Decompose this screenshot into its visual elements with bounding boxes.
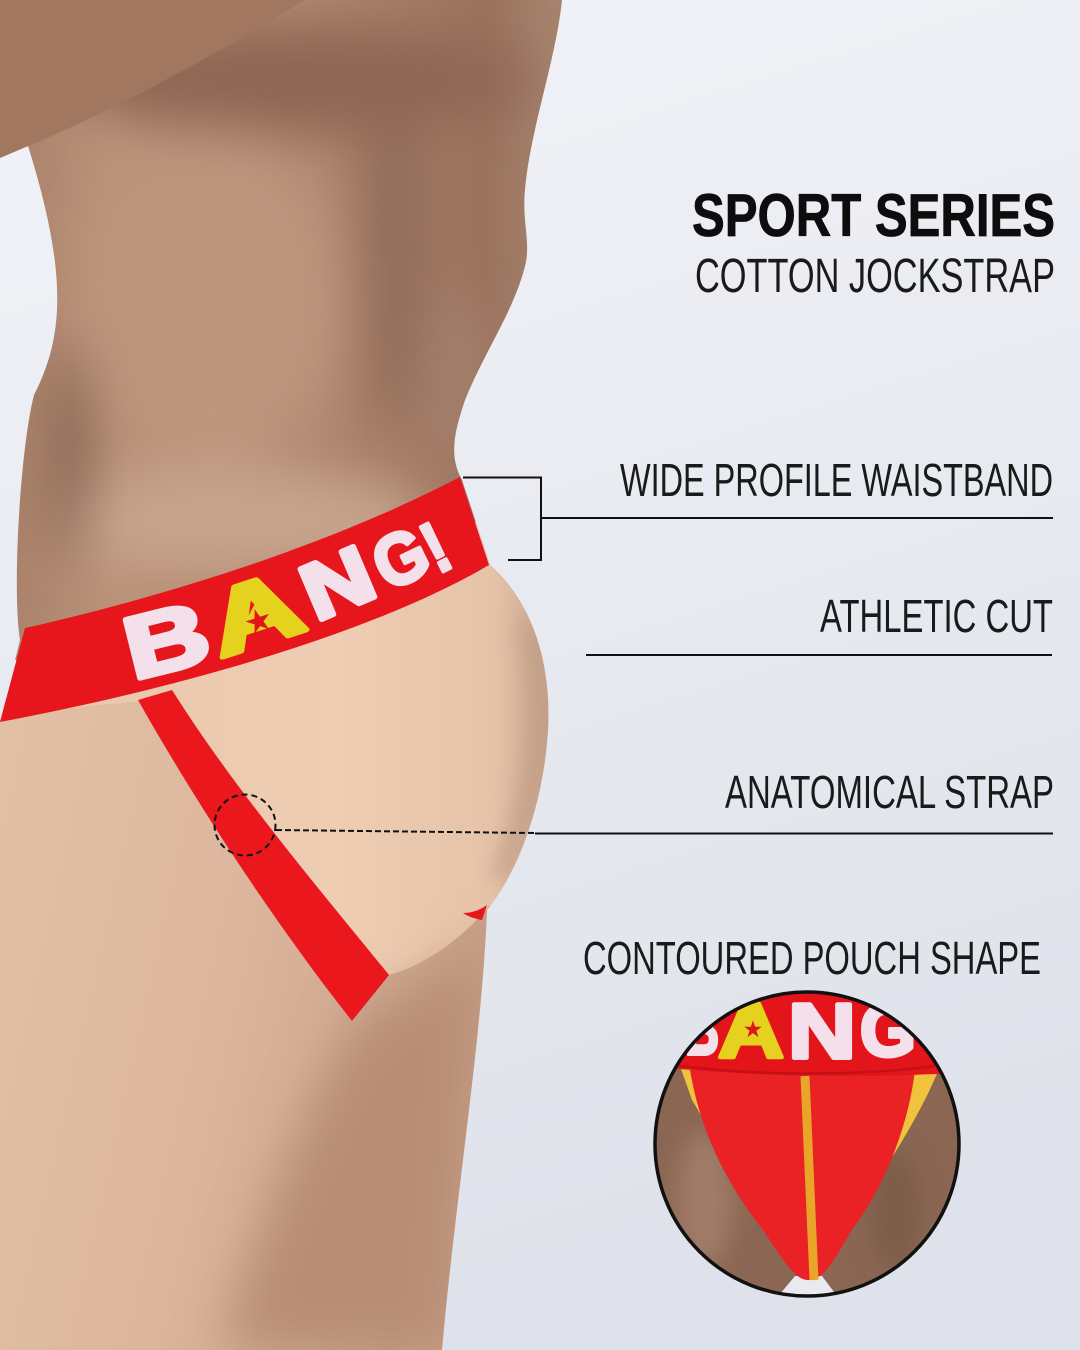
logo: BANG!: G [360,512,442,606]
inset logo: ★ [744,1019,762,1041]
callout: anatomical strap [214,766,1054,856]
logo: BANG!: ! [409,508,463,588]
logo: BANG!: N [288,528,387,638]
arm [0,0,305,158]
inset pouch [690,1070,915,1280]
hip [0,520,560,1000]
photo: model figure [0,0,570,1350]
torso shading [45,25,530,570]
strap tip on thigh [463,905,487,920]
inset: pouch detail [650,986,970,1300]
inset logo: G [860,989,916,1072]
band [0,477,489,722]
inset ring [655,992,959,1296]
inset seam [805,1076,814,1280]
callout: wide profile waistband [463,454,1053,560]
logo: BANG!: ★ [242,602,275,640]
leg [0,700,490,1350]
inset gap [782,1276,834,1294]
inset skin [656,1068,958,1292]
inset yellow trim [681,1069,937,1158]
logo: BANG!: A [195,551,316,677]
waistband [0,477,489,1021]
inset waistband [677,994,940,1076]
hip shading [498,620,539,880]
inset logo: A [718,986,784,1074]
inset logo [686,1002,914,1060]
inset band edge [680,1066,935,1074]
torso [0,0,570,660]
logo: BANG!: B [114,582,219,698]
inset logo: N [788,987,856,1075]
leg shading [225,940,480,1350]
inset logo: B [685,990,719,1070]
logo: BANG! [114,508,463,698]
inset skin highlight [677,1130,919,1270]
strap [138,690,389,1021]
